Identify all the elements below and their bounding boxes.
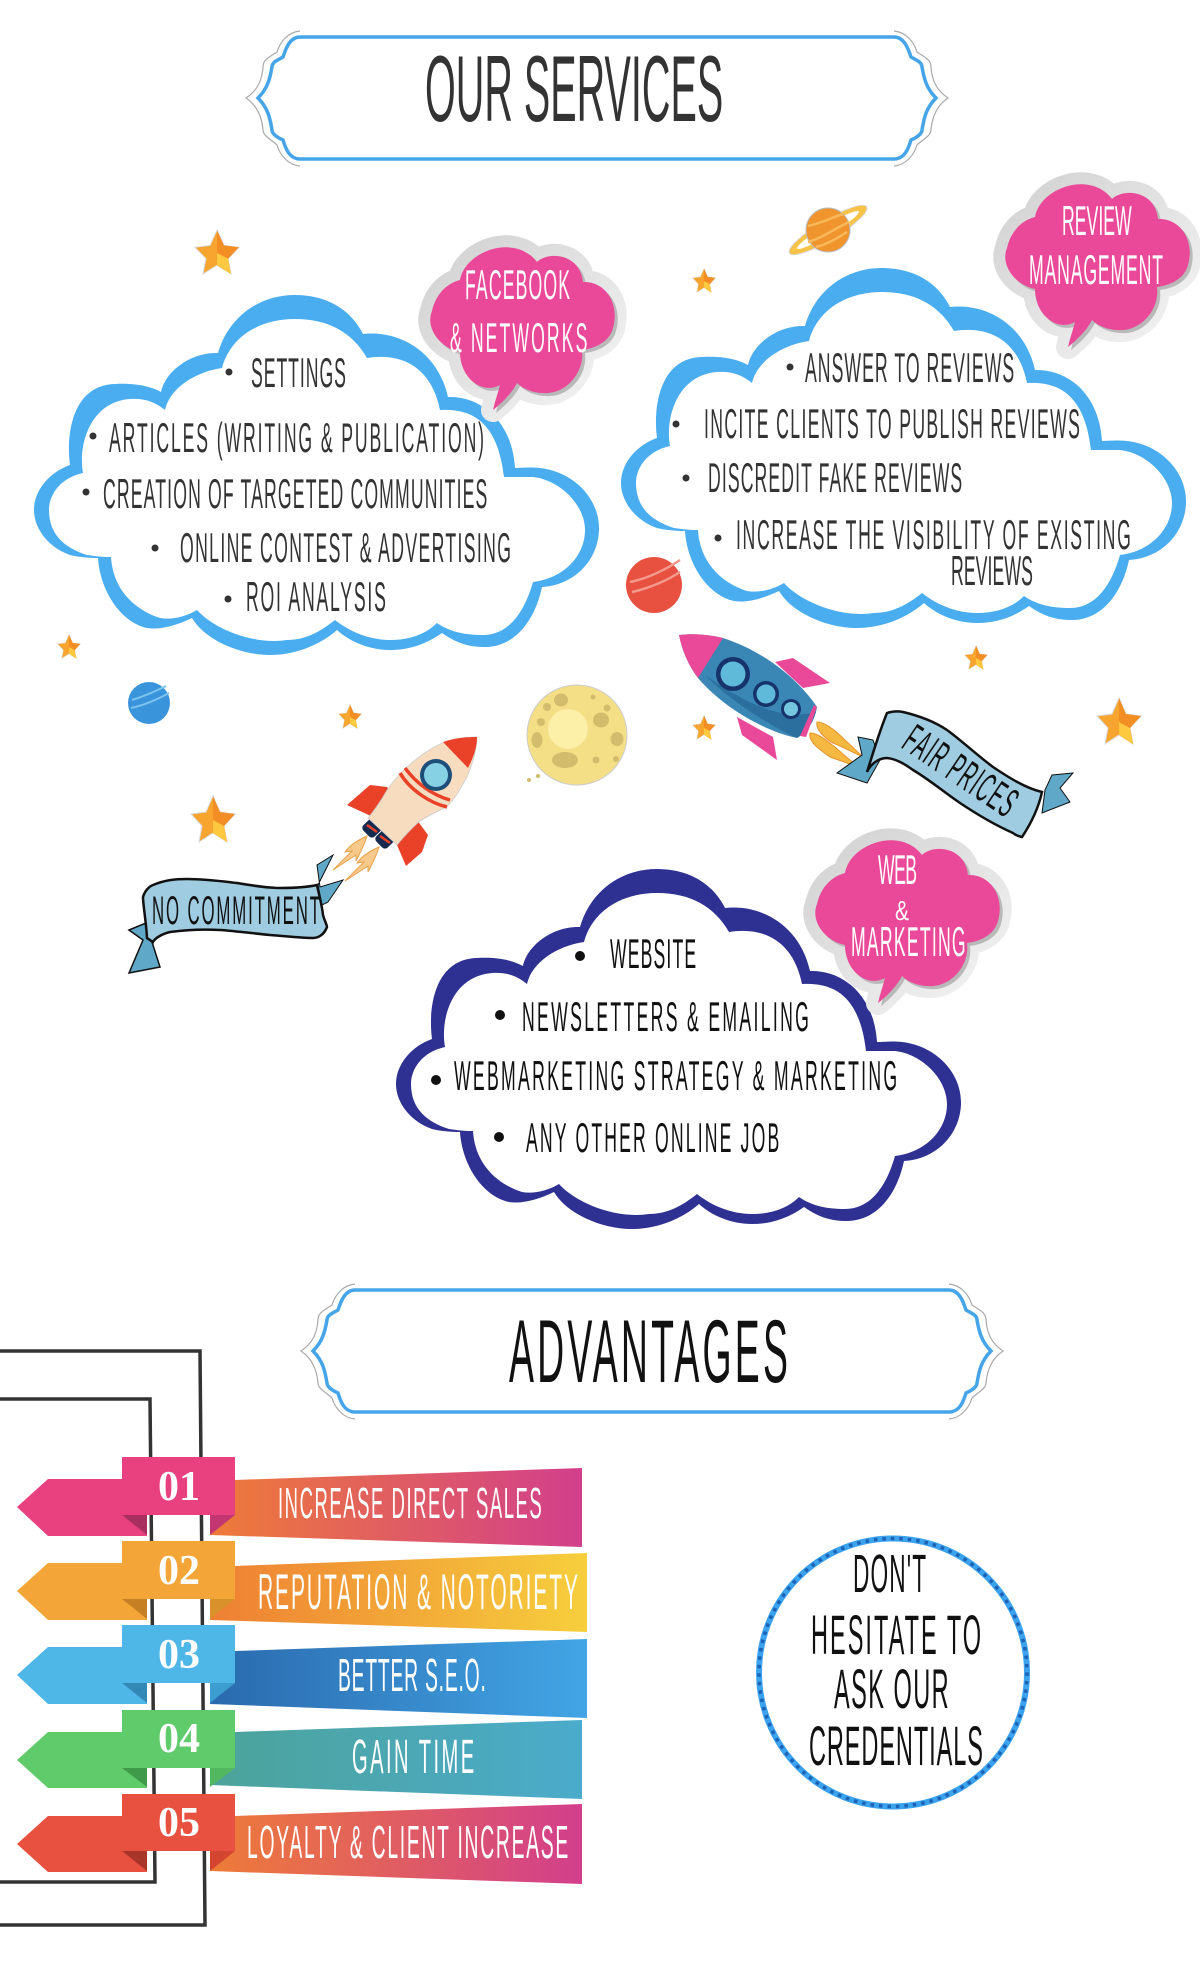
callout circle: credentials: DON'T (853, 1544, 926, 1604)
speech bubble: web and marketing: MARKETING (851, 918, 966, 965)
planet: blue (128, 682, 170, 724)
cloud panel: facebook and networks (34, 295, 599, 655)
star (195, 230, 239, 274)
bullet list: review services: DISCREDIT FAKE REVIEWS (708, 454, 962, 501)
bullet list: web services: WEBMARKETING STRATEGY & MARKETING (454, 1052, 897, 1099)
connector lines behind list (0, 1351, 205, 1925)
list row 01: increase direct sales: INCREASE DIRECT SALES (278, 1479, 542, 1528)
rocket: blue and pink (679, 634, 863, 767)
bullet list: facebook services: ONLINE CONTEST & ADVERTISING (180, 524, 511, 571)
cloud panel: web and marketing (396, 869, 961, 1229)
moon (527, 685, 627, 785)
banner text: NO COMMITMENT (152, 889, 320, 933)
list row 01: increase direct sales: 01 (158, 1464, 200, 1510)
bullet list: facebook services: ROI ANALYSIS (246, 573, 386, 620)
list row 05: loyalty and client increase: LOYALTY & CLIENT INCREASE (247, 1818, 568, 1868)
speech bubble: review management (1005, 184, 1193, 350)
callout circle: credentials (759, 1538, 1027, 1806)
bullet list: facebook services: CREATION OF TARGETED COMMUNITIES (103, 470, 487, 517)
planet: red (626, 557, 682, 613)
speech bubble: facebook and networks: FACEBOOK (465, 261, 570, 308)
list row 03: better seo (17, 1625, 587, 1718)
star (965, 646, 987, 669)
list row 02: reputation and notoriety: REPUTATION & NOTORIETY (258, 1565, 578, 1621)
planet: orange ringed (784, 198, 872, 262)
bullet list: facebook services (82, 349, 511, 620)
heading: our services: OUR SERVICES (425, 38, 723, 142)
bullet list: facebook services: SETTINGS (251, 349, 346, 396)
banner: no commitment (129, 855, 343, 973)
callout circle: credentials: HESITATE TO (811, 1604, 981, 1667)
speech bubble: web and marketing: WEB (878, 846, 917, 893)
bullet list: review services (672, 344, 1131, 594)
bullet list: facebook services: ARTICLES (WRITING & PUBLICATION) (109, 414, 484, 461)
callout circle: credentials: CREDENTIALS (809, 1715, 983, 1778)
list row 04: gain time: 04 (158, 1716, 200, 1762)
speech bubble: web and marketing (815, 840, 1003, 1006)
bullet list: review services: INCITE CLIENTS TO PUBLISH REVIEWS (704, 400, 1080, 447)
list row 04: gain time: GAIN TIME (352, 1730, 474, 1783)
heading: advantages: ADVANTAGES (509, 1302, 788, 1402)
bullet list: review services: ANSWER TO REVIEWS (805, 344, 1014, 391)
list row 01: increase direct sales (17, 1457, 582, 1547)
star (693, 716, 715, 739)
banner: fair prices (837, 711, 1073, 837)
bullet list: web services: WEBSITE (610, 930, 696, 977)
star (1097, 698, 1141, 744)
list row 03: better seo: BETTER S.E.O. (338, 1651, 486, 1701)
list row 02: reputation and notoriety: 02 (158, 1548, 200, 1594)
list row 05: loyalty and client increase: 05 (158, 1800, 200, 1846)
cloud panel: review management (621, 268, 1186, 628)
star (191, 796, 235, 842)
title plaque: our services (246, 31, 948, 166)
bullet list: review services: REVIEWS (951, 547, 1033, 594)
star (693, 269, 715, 292)
speech bubble: review management: MANAGEMENT (1029, 246, 1163, 293)
speech bubble: facebook and networks: & NETWORKS (450, 314, 587, 361)
bullet list: web services (431, 930, 897, 1161)
speech bubble: review management: REVIEW (1062, 197, 1132, 244)
speech bubble: facebook and networks (430, 247, 618, 413)
bullet list: review services: INCREASE THE VISIBILITY OF EXISTING (736, 511, 1131, 558)
title plaque: advantages (301, 1284, 1003, 1419)
star (339, 705, 361, 728)
banner text: FAIR PRICES (895, 716, 1027, 826)
star (58, 635, 80, 658)
list row 04: gain time (17, 1710, 582, 1799)
list row 02: reputation and notoriety (17, 1541, 587, 1632)
rocket: red and cream (333, 737, 477, 881)
list row 03: better seo: 03 (158, 1632, 200, 1678)
bullet list: web services: NEWSLETTERS & EMAILING (522, 993, 809, 1040)
speech bubble: web and marketing: & (895, 896, 909, 927)
list row 05: loyalty and client increase (17, 1794, 582, 1884)
callout circle: credentials: ASK OUR (834, 1658, 949, 1721)
bullet list: web services: ANY OTHER ONLINE JOB (526, 1114, 779, 1161)
